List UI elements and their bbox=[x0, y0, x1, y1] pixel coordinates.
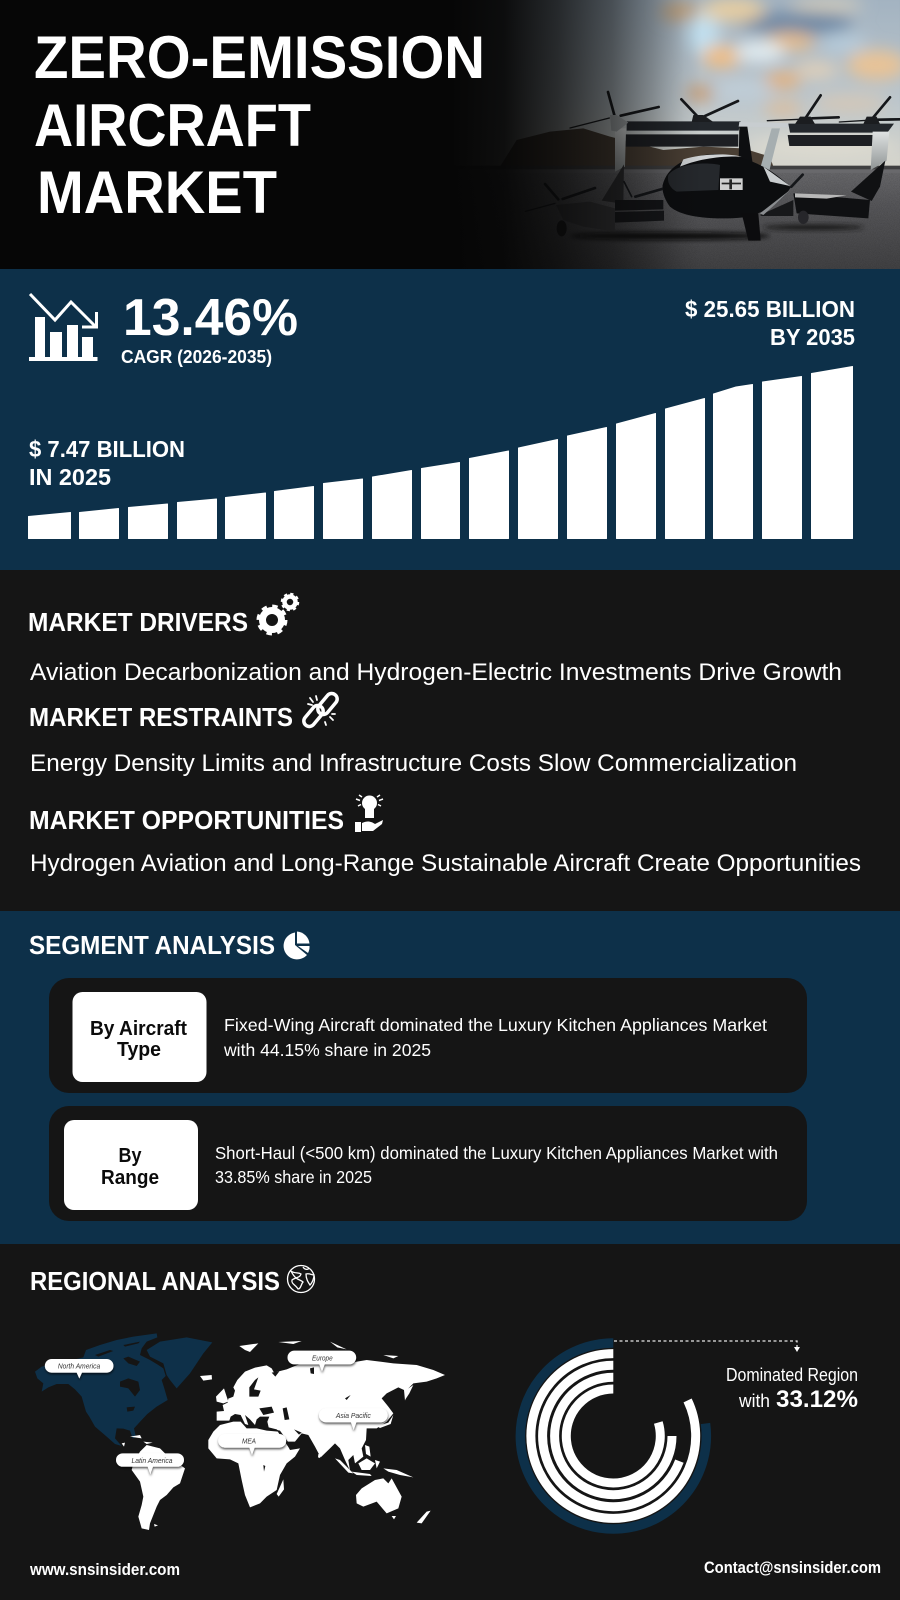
callout labels: Latin America bbox=[131, 1458, 173, 1465]
callouts bbox=[45, 1351, 388, 1474]
title bbox=[34, 24, 485, 226]
dashed leader arrow bbox=[614, 1341, 800, 1352]
heading: market restraints: MARKET RESTRAINTS bbox=[29, 702, 293, 732]
description bbox=[223, 1015, 767, 1060]
landing gear bbox=[742, 213, 761, 241]
text: restraint: Energy Density Limits and Infrastructure Costs Slow Commercialization bbox=[30, 750, 797, 777]
end value bbox=[685, 296, 855, 350]
radial bar chart bbox=[520, 1343, 706, 1529]
heading: segment analysis: SEGMENT ANALYSIS bbox=[29, 930, 275, 960]
panel: regional analysis bbox=[30, 1266, 858, 1530]
seas in Eurasia and Africa bbox=[249, 1367, 351, 1472]
dominated region text: with bbox=[738, 1391, 770, 1411]
start value: IN 2025 bbox=[29, 464, 111, 490]
label text bbox=[90, 1018, 187, 1061]
heading: market drivers: MARKET DRIVERS bbox=[28, 607, 248, 637]
CAGR label: CAGR (2026-2035) bbox=[121, 346, 272, 367]
wings bbox=[627, 121, 741, 131]
icon: chart with falling arrow bbox=[29, 294, 98, 361]
description: 33.85% share in 2025 bbox=[215, 1167, 372, 1187]
label text bbox=[101, 1145, 159, 1189]
dominated region text bbox=[726, 1365, 858, 1413]
icon: globe bbox=[288, 1266, 314, 1292]
end value: $ 25.65 BILLION bbox=[685, 296, 855, 322]
label text: Range bbox=[101, 1167, 159, 1189]
label box bbox=[64, 1120, 198, 1210]
heading: market opportunities: MARKET OPPORTUNITIES bbox=[29, 805, 344, 835]
heading: regional analysis: REGIONAL ANALYSIS bbox=[30, 1266, 280, 1296]
pylons bbox=[615, 128, 626, 172]
description bbox=[215, 1143, 778, 1187]
description: Fixed-Wing Aircraft dominated the Luxury Kitchen Appliances Market bbox=[224, 1015, 767, 1035]
icon: gears bbox=[258, 594, 298, 634]
seas in Canada bbox=[95, 1342, 140, 1412]
footer: website: www.snsinsider.com bbox=[29, 1561, 180, 1579]
ground shadow bbox=[570, 232, 770, 240]
start value bbox=[29, 436, 185, 490]
dominated region text: Dominated Region bbox=[726, 1365, 858, 1385]
panel: segment analysis bbox=[0, 911, 900, 1244]
title: MARKET bbox=[37, 159, 277, 226]
region: rest of the world bbox=[122, 1341, 445, 1530]
world map bbox=[35, 1333, 445, 1530]
callout labels: Asia Pacific bbox=[335, 1413, 371, 1420]
gradient fade to black bbox=[450, 0, 694, 269]
icon: hand holding light bulb bbox=[355, 795, 383, 832]
title: AIRCRAFT bbox=[34, 92, 311, 159]
icon: broken chain link bbox=[302, 691, 339, 729]
callout labels: MEA bbox=[242, 1438, 256, 1445]
callout labels: North America bbox=[58, 1363, 100, 1370]
text: driver: Aviation Decarbonization and Hydrogen-Electric Investments Drive Growth bbox=[30, 659, 842, 686]
card: by range bbox=[49, 1106, 807, 1221]
fuselage bbox=[662, 154, 791, 218]
callout labels: Europe bbox=[312, 1355, 333, 1362]
dominated region text: 33.12% bbox=[776, 1386, 858, 1413]
callout labels bbox=[58, 1355, 371, 1465]
region: North America bbox=[35, 1333, 212, 1446]
label text: Type bbox=[117, 1039, 161, 1061]
bar chart bbox=[28, 366, 852, 538]
start value: $ 7.47 BILLION bbox=[29, 436, 185, 462]
booms, fins bbox=[573, 202, 615, 228]
label box bbox=[72, 992, 206, 1082]
description: Short-Haul (<500 km) dominated the Luxury Kitchen Appliances Market with bbox=[215, 1143, 778, 1163]
hills on horizon bbox=[500, 128, 773, 167]
card: by aircraft type bbox=[49, 978, 807, 1093]
panel: market drivers, restraints, opportunities bbox=[28, 594, 861, 877]
label text: By bbox=[118, 1145, 142, 1167]
text: opportunity: Hydrogen Aviation and Long-Range Sustainable Aircraft Create Opportunities bbox=[30, 850, 861, 877]
label text: By Aircraft bbox=[90, 1018, 187, 1040]
icon: pie chart bbox=[284, 932, 310, 959]
propellers bbox=[525, 92, 900, 211]
image: aircraft on runway bbox=[502, 0, 900, 269]
panel: header bbox=[0, 0, 900, 269]
CAGR value: 13.46% bbox=[123, 289, 298, 347]
title: ZERO-EMISSION bbox=[34, 24, 485, 91]
end value: BY 2035 bbox=[770, 324, 855, 350]
panel: market size bbox=[0, 269, 900, 570]
description: with 44.15% share in 2025 bbox=[223, 1040, 431, 1060]
footer: contact: Contact@snsinsider.com bbox=[704, 1559, 881, 1577]
